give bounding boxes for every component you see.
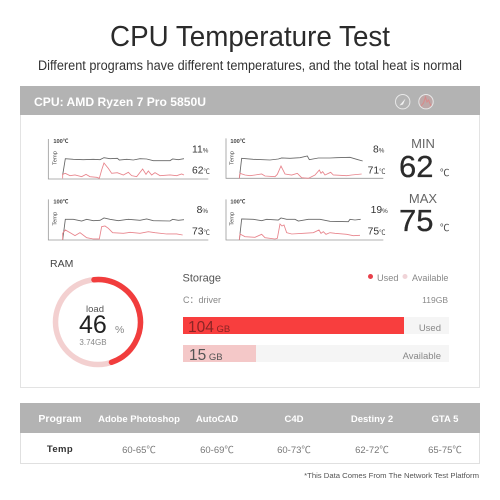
chart: core 3: 73℃ (192, 226, 210, 237)
chart: core 3: Temp (52, 212, 58, 226)
stat: maximum temperature: 75 (399, 203, 433, 238)
panel: CPU test results (20, 86, 480, 388)
panel header bar (20, 86, 480, 115)
chart: core 1: 11% (192, 144, 209, 155)
drive capacity: 119GB (422, 295, 448, 305)
bar: used storage: Used (419, 323, 441, 334)
panel header bar: CPU: AMD Ryzen 7 Pro 5850U (34, 95, 206, 109)
stat: minimum temperature: 62 (399, 149, 433, 184)
RAM donut gauge: load (86, 304, 104, 315)
bar: used storage: 104 GB (188, 319, 230, 336)
table data row: 60-73℃ (277, 445, 311, 456)
bar: used storage (183, 317, 449, 336)
bar: available storage: Available (403, 351, 441, 362)
RAM donut gauge: 46 (79, 311, 107, 339)
chart: core 3: 8% (197, 205, 208, 216)
storage heading: Storage (182, 272, 221, 284)
RAM donut gauge (56, 280, 140, 364)
chart: core 2: Temp (229, 151, 235, 165)
chart: core 2: 100℃ (230, 138, 246, 145)
title: CPU Temperature Test (110, 21, 390, 53)
chart: core 4: 75℃ (368, 226, 386, 237)
chart: core 2 (226, 138, 386, 178)
stat: maximum temperature: ℃ (440, 223, 450, 234)
RAM donut gauge: 3.74GB (79, 338, 107, 347)
chart: core 3 (48, 199, 210, 240)
bar: available storage: 15 GB (189, 347, 223, 364)
table header row (20, 403, 480, 433)
table data row: Temp (47, 444, 73, 455)
table header row: Adobe Photoshop (98, 414, 180, 425)
stat: maximum temperature: MAX (409, 191, 437, 206)
chart: core 4 (226, 199, 388, 240)
chart: core 4: 19% (371, 205, 388, 216)
table header row: Program (38, 413, 82, 425)
table header row: C4D (284, 414, 304, 425)
stat: minimum temperature: ℃ (440, 168, 450, 179)
table header row: AutoCAD (196, 414, 238, 425)
storage legend: Available (412, 273, 448, 283)
stat: maximum temperature (399, 191, 450, 238)
subtitle: Different programs have different temperatures, and the total heat is normal (38, 58, 462, 73)
storage legend (368, 273, 448, 283)
RAM label: RAM (50, 258, 73, 270)
table data row: 60-69℃ (200, 445, 234, 456)
icon: temperature wave (419, 94, 433, 109)
stat: minimum temperature (399, 136, 450, 184)
table: program temperatures (20, 403, 480, 464)
table header row: Destiny 2 (351, 414, 393, 425)
table data row: 60-65℃ (122, 445, 156, 456)
footnote: *This Data Comes From The Network Test Platform (304, 471, 479, 480)
chart: core 4: Temp (229, 212, 235, 226)
storage legend: Used (377, 273, 398, 283)
chart: core 3: 100℃ (53, 199, 69, 206)
drive label: C：driver (183, 295, 221, 305)
chart: core 4: 100℃ (230, 199, 246, 206)
table data row: 62-72℃ (355, 445, 389, 456)
icon: gauge (396, 94, 410, 109)
table data row (47, 444, 462, 456)
chart: core 1 (48, 138, 210, 179)
table header row: GTA 5 (432, 414, 459, 425)
chart: core 2: 8% (373, 144, 385, 155)
table data row: 65-75℃ (428, 445, 462, 456)
chart: core 1: 62℃ (192, 166, 210, 177)
chart: core 2: 71℃ (368, 166, 386, 177)
chart: core 1: 100℃ (53, 138, 69, 145)
stat: minimum temperature: MIN (411, 136, 435, 151)
bar: available storage (183, 345, 449, 364)
chart: core 1: Temp (52, 151, 58, 165)
RAM donut gauge: % (115, 324, 124, 336)
